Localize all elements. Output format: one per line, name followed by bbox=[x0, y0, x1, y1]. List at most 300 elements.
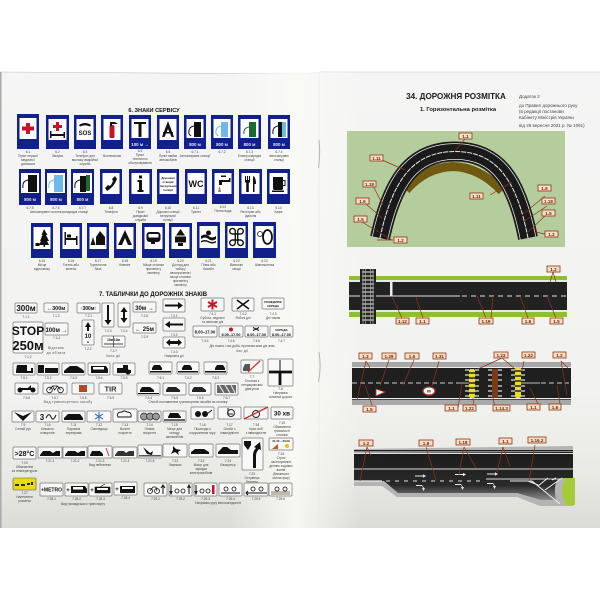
panel: service signs row 1 bbox=[17, 114, 290, 166]
caption: parking method: Спосіб поставлення транспортних засобів на стоянку bbox=[148, 400, 228, 404]
plate 7.4.5: 7.4.5 bbox=[227, 339, 235, 343]
sign 6.1: медичної bbox=[21, 158, 35, 162]
plate 7.21.4 bbox=[113, 447, 137, 463]
plate 7.24: Евакуатор bbox=[220, 463, 236, 467]
plate 7.4.3: Дні тижня bbox=[266, 316, 280, 320]
plate 7.9: Сліпий рух bbox=[15, 427, 31, 431]
text block: addendum note: Кабінету Міністрів України bbox=[519, 115, 574, 120]
sign 6.7.6: 6.7.6 bbox=[52, 206, 60, 210]
plate 7.4.2: 7.4.2 bbox=[239, 312, 247, 316]
sign 6.3: служби bbox=[80, 162, 91, 166]
sign 6.5: Пункт bbox=[136, 153, 145, 157]
sign 6.19: 6.19 bbox=[150, 259, 157, 263]
plate 7.6.6 bbox=[189, 383, 211, 400]
sign 6.10: поліції bbox=[163, 188, 173, 192]
plate 7.1.3 bbox=[44, 303, 68, 318]
sign 6.15: відпочинку bbox=[34, 267, 50, 271]
plate 7.27 marking: розмітки bbox=[18, 499, 31, 503]
sign 6.7.3: 6.7.3 bbox=[246, 150, 253, 154]
labels: 1.11 bbox=[472, 194, 481, 199]
sign 6.2 bbox=[46, 115, 69, 158]
plate 7.13: покриття bbox=[118, 431, 132, 435]
labels: 1.6 bbox=[409, 354, 416, 359]
plate 7.28.4 tram: + bbox=[115, 487, 119, 493]
sign 6.9: 6.9 bbox=[138, 206, 143, 210]
sign 6.23: Шиномонтаж bbox=[255, 263, 275, 267]
heading: section 6: 6. ЗНАКИ СЕРВІСУ bbox=[128, 108, 180, 114]
text block: addendum note: від 29 вересня 2021 р. № 1091) bbox=[519, 123, 585, 128]
plate 7.5.8 dangerous goods: 7.5.8 bbox=[79, 396, 87, 400]
plate 7.4.3: 7.4.3 bbox=[269, 312, 277, 316]
plate 7.11 bbox=[62, 411, 85, 435]
plate 7.28.1 metro bbox=[40, 483, 63, 501]
plate 7.1.4: Відстань bbox=[48, 346, 64, 350]
plate 7.6.4 bbox=[137, 383, 160, 400]
sign 6.1: Пункт першої bbox=[18, 154, 38, 158]
plate 7.18: 7.18 bbox=[253, 423, 259, 427]
plate 7.26: 01.03 – 30.09 bbox=[272, 439, 290, 443]
plate 7.16: 7.16 bbox=[199, 423, 206, 427]
sign 6.20: причепів у bbox=[173, 279, 189, 283]
plate 7.4.2: Робочі дні bbox=[236, 316, 251, 320]
sign 6.1: допомоги bbox=[21, 162, 35, 166]
plate 7.26 bbox=[269, 438, 293, 480]
plate 7.16: порушенням зору bbox=[189, 431, 216, 435]
plate 7.15: автомобілів bbox=[166, 435, 183, 439]
sign 6.16 bbox=[60, 223, 82, 271]
plate 7.6.7 bbox=[215, 383, 238, 400]
plate 7.13: Вологе bbox=[120, 427, 130, 431]
plate 7.4.3 bbox=[262, 298, 284, 320]
brown island bbox=[406, 166, 502, 191]
plate 7.16: Пішоходи з bbox=[194, 427, 211, 431]
sign 6.12: 6.12 bbox=[220, 205, 226, 209]
plate 7.1.2 stop: 250м bbox=[12, 338, 44, 353]
speed limit marking: 60 bbox=[427, 390, 431, 394]
panel: curved road diagram bbox=[347, 131, 565, 247]
labels: 1.18 bbox=[459, 440, 468, 445]
plate 7.6.2: 7.6.2 bbox=[184, 376, 192, 380]
sign 6.6: автомобілів bbox=[159, 158, 177, 162]
text block: addendum note bbox=[519, 94, 585, 128]
plate 7.7: непрацюючим bbox=[242, 383, 262, 387]
sign 6.8: Телефон bbox=[104, 210, 118, 214]
sign 6.7.6 bbox=[30, 169, 88, 214]
plate 7.10 bbox=[36, 411, 59, 435]
plate 7.4.3: СЕРЕДА bbox=[267, 304, 280, 308]
labels: 1.22 bbox=[465, 406, 474, 411]
sign 6.10: патрульної bbox=[160, 214, 176, 218]
sign 6.20: кемпінгу bbox=[174, 283, 187, 287]
plate 7.2.1: 7.2.1 bbox=[85, 314, 92, 318]
plate 7.2.4: 7.2.4 bbox=[120, 329, 128, 333]
plate 7.1.3: 7.1.3 bbox=[52, 314, 60, 318]
labels: 1.5 bbox=[357, 217, 364, 222]
plate 7.4.6: 8.00–17.00 bbox=[247, 333, 266, 337]
sign 6.7.2: 6.7.2 bbox=[218, 150, 226, 154]
sign 6.7.4: 800 м bbox=[273, 142, 285, 147]
sign 6.13 bbox=[239, 169, 262, 218]
plate 7.26: Строк bbox=[277, 456, 286, 460]
plate 7.20 bbox=[12, 447, 38, 473]
plate 7.28.2 bus bbox=[65, 483, 88, 501]
plate 7.3.1: 7.3.1 bbox=[170, 314, 178, 318]
sign 6.10: 6.10 bbox=[165, 206, 171, 210]
panel: service signs row 3 bbox=[31, 222, 276, 287]
plate 7.12 bbox=[87, 411, 111, 431]
plate 7.21.2 bbox=[63, 447, 87, 463]
labels: 1.1 bbox=[502, 439, 509, 444]
sign 6.15: Місце bbox=[38, 263, 46, 267]
sign 6.7.5 bbox=[19, 169, 41, 210]
plate 7.23: електромобілів bbox=[190, 471, 213, 475]
sign 6.21: басейн bbox=[203, 267, 214, 271]
plate 7.1.2 stop bbox=[12, 322, 44, 359]
plate 7.19: стоянки bbox=[276, 433, 288, 437]
sign 6.5: 6.5 bbox=[138, 149, 142, 153]
plate 7.4.7: 8.00–17.00 bbox=[272, 333, 291, 337]
plate 7.1.1 bbox=[15, 303, 37, 319]
plate 7.1.4: 100м → bbox=[45, 328, 68, 334]
sign 6.9: Пункт bbox=[136, 210, 145, 214]
labels: 1.18 bbox=[544, 199, 553, 204]
yellow speed bump right bbox=[515, 367, 521, 398]
plate 7.2.4 bbox=[118, 303, 130, 333]
plate 7.28.3 trolleybus: + bbox=[90, 488, 94, 494]
lane arrows bbox=[415, 472, 498, 491]
plate 7.24 bbox=[216, 444, 240, 467]
plate 7.2.7: Зона дії bbox=[106, 354, 120, 358]
background: green field bbox=[347, 131, 565, 247]
sign 6.10: Дорожня bbox=[161, 176, 175, 180]
sign 6.12 bbox=[212, 169, 234, 213]
plate 7.22: Лижники bbox=[169, 463, 182, 467]
plate 7.4.1 bbox=[200, 298, 225, 324]
plate 7.4.6 bbox=[245, 326, 268, 343]
sign 6.7.3 bbox=[238, 115, 261, 162]
sign 6.7.1 bbox=[180, 115, 210, 158]
text block: addendum note: Додаток 2 bbox=[519, 94, 540, 99]
sign 6.7.6: Автозаправні та електрозарядні станції bbox=[30, 210, 88, 214]
sign 6.3: Телефон для bbox=[75, 154, 95, 158]
sign 6.20: автопричепів і bbox=[170, 271, 191, 275]
plate 7.25: Острівець bbox=[245, 476, 260, 480]
plate 7.2.7: 10м 10м bbox=[107, 338, 120, 342]
sign 6.7.4: Автозаправні bbox=[269, 154, 289, 158]
sign 6.7.4: станції bbox=[274, 158, 284, 162]
curved road bbox=[380, 152, 528, 238]
plate 7.28.3 trolleybus: 7.28.3 bbox=[96, 497, 105, 501]
plate 7.26: денних ходових bbox=[269, 464, 293, 468]
sign 6.17 bbox=[87, 223, 109, 271]
plate 7.28.2 bus: 7.28.2 bbox=[72, 497, 81, 501]
labels: 1.31 bbox=[435, 354, 444, 359]
plate 7.29.5 bbox=[244, 483, 268, 501]
plate 7.29.4 bbox=[219, 483, 242, 501]
sign 6.7.4 bbox=[268, 115, 290, 162]
plate 7.6.5: 7.6.5 bbox=[171, 396, 178, 400]
sign 6.18 bbox=[114, 223, 136, 267]
sign 6.17: база bbox=[95, 267, 102, 271]
plate 7.20: за температурою bbox=[12, 469, 38, 473]
panel: road with exit lane bbox=[354, 437, 575, 506]
plate 7.17 bbox=[218, 407, 241, 435]
labels: 1.2 bbox=[550, 267, 557, 272]
yellow speed bump left bbox=[469, 369, 475, 398]
plate 7.1.2 stop: STOP bbox=[12, 324, 44, 338]
plate 7.11: 7.11 bbox=[71, 423, 77, 427]
plate 7.4.5: 8.00–17.00 bbox=[221, 333, 241, 337]
magazine spread bbox=[0, 72, 600, 528]
plate 7.28.4 tram: 7.28.4 bbox=[121, 496, 130, 500]
sign 6.10: патрульної bbox=[160, 184, 176, 188]
sign 6.7.7: 800 м bbox=[77, 197, 88, 202]
plate 7.3.3: 7.3.3 bbox=[170, 350, 178, 354]
plate 7.5.1 truck: 7.5.1 bbox=[20, 376, 28, 380]
plate 7.23: Місце для bbox=[194, 463, 209, 467]
sign 6.19 bbox=[142, 223, 165, 275]
labels: 1.2 bbox=[397, 238, 404, 243]
plate 7.9: 7.9 bbox=[21, 423, 25, 427]
sign 6.7.4: 6.7.4 bbox=[275, 150, 283, 154]
text block: addendum note: до Правил дорожнього руху bbox=[519, 103, 578, 108]
labels: 1.6 bbox=[541, 186, 548, 191]
sign 6.5: обслуговування bbox=[128, 161, 152, 165]
plate 7.2.8: 7.2.8 bbox=[141, 314, 148, 318]
sign 6.1: 6.1 bbox=[26, 150, 30, 154]
sign 6.23: 6.23 bbox=[261, 259, 268, 263]
sign 6.7.3: Електрозарядні bbox=[238, 154, 261, 158]
plate 7.21.5 bbox=[138, 445, 162, 463]
sign 6.15: 6.15 bbox=[39, 259, 45, 263]
plate 7.2.7: 7.2.7 bbox=[110, 349, 117, 353]
plate 7.2.1 bbox=[77, 303, 100, 318]
caption: cycling direction: Напрямок руху велосипедистів bbox=[195, 501, 241, 505]
labels: 1.5 bbox=[553, 319, 560, 324]
plate 7.24: 7.24 bbox=[225, 459, 231, 463]
plate 7.29.3: 7.29.3 bbox=[201, 497, 210, 501]
labels: 1.11 bbox=[372, 156, 381, 161]
sign 6.3: виклику аварійної bbox=[72, 158, 98, 162]
sign 6.9: служби bbox=[135, 218, 146, 222]
sign 6.15 bbox=[31, 223, 53, 271]
sign 6.23 bbox=[253, 222, 276, 267]
road surface bbox=[354, 446, 573, 506]
plate 7.10: 3 bbox=[40, 413, 45, 422]
plate 7.2.9: 7.2.9 bbox=[141, 335, 148, 339]
plate 7.29.2: 7.29.2 bbox=[176, 497, 185, 501]
plate 7.5.7 bicycle: 7.5.7 bbox=[51, 396, 59, 400]
plate 7.26: 7.26 bbox=[278, 452, 284, 456]
sign 6.7.7 bbox=[71, 169, 94, 210]
labels: 1.14.3 bbox=[495, 406, 508, 411]
plate 7.1.4: 7.1.4 bbox=[53, 336, 60, 340]
plate 7.13: 7.13 bbox=[122, 423, 128, 427]
sign 6.16: мотель bbox=[66, 267, 77, 271]
panel: road with speed bumps bbox=[352, 352, 571, 412]
plate 7.11: Паромна bbox=[67, 427, 80, 431]
plate 7.26: світла фар) bbox=[272, 476, 290, 480]
plate 7.17: 7.17 bbox=[226, 423, 233, 427]
plate 7.4.1: 7.4.1 bbox=[209, 312, 216, 316]
plate 7.15: 7.15 bbox=[171, 423, 178, 427]
plate 7.15: огляду bbox=[170, 431, 180, 435]
plate 7.29.1 bbox=[144, 483, 167, 501]
plate 7.2.2: 7.2.2 bbox=[84, 347, 92, 351]
labels bbox=[392, 266, 563, 324]
plate 7.2.1: ↑300м↑ bbox=[80, 306, 97, 312]
plate 7.4.3: ПОНЕДІЛОК bbox=[264, 300, 282, 304]
sign 6.10: станція bbox=[162, 180, 174, 184]
plate 7.4.2 bbox=[232, 298, 254, 320]
plate 7.4.5 bbox=[219, 326, 243, 343]
panel: distance and zone plates bbox=[12, 298, 293, 359]
plate 7.29.6 bbox=[269, 483, 292, 501]
plate 7.20: 7.20 bbox=[21, 461, 28, 465]
plate 7.3.2 bbox=[163, 318, 185, 337]
sign 6.3: SOS bbox=[79, 131, 91, 137]
labels bbox=[354, 133, 558, 243]
plate 7.4.4: 8.00–17.00 bbox=[195, 330, 216, 334]
sign 6.20: 6.20 bbox=[177, 259, 184, 263]
panel: route and bicycle plates row bbox=[13, 478, 292, 506]
sign 6.10: Дорожні станції bbox=[157, 210, 180, 214]
plate 7.21.5: 7.21.5 bbox=[146, 459, 155, 463]
plate 7.21.1 bbox=[38, 447, 62, 463]
plate 7.3.3: Напрямок дії bbox=[165, 354, 184, 358]
sign 6.7.2 bbox=[211, 115, 233, 154]
sign 6.10 bbox=[157, 169, 180, 222]
plate 7.4.7: 7.4.7 bbox=[278, 339, 285, 343]
caption: public transport: Вид громадського транспорту bbox=[61, 502, 105, 506]
plate 7.22 bbox=[163, 444, 187, 467]
plate 7.29.3 bbox=[194, 483, 217, 501]
plate 7.6.7: 7.6.7 bbox=[223, 396, 230, 400]
plate 7.5.9 TIR: TIR bbox=[104, 384, 117, 394]
labels: 1.1 bbox=[462, 134, 469, 139]
sign 6.7.1: 800 м bbox=[189, 142, 201, 147]
labels: 1.23 bbox=[497, 353, 506, 358]
plate 7.2.2: 10 bbox=[85, 334, 92, 340]
plate 7.27 marking: 7.27 bbox=[21, 491, 28, 495]
plate 7.17: Особи з bbox=[224, 427, 236, 431]
labels: 1.2 bbox=[548, 232, 555, 237]
sign 6.21: 6.21 bbox=[205, 259, 212, 263]
labels: 1.8 bbox=[423, 441, 430, 446]
sign 6.6 bbox=[157, 115, 179, 162]
labels: 1.12 bbox=[398, 319, 407, 324]
plate 7.23: зарядки bbox=[195, 467, 207, 471]
sign 6.4 bbox=[101, 115, 123, 158]
plate 7.10: 7.10 bbox=[44, 423, 51, 427]
sign 6.16: Готель або bbox=[63, 263, 79, 267]
labels: 1.5 bbox=[545, 211, 552, 216]
plate 7.6.4: 7.6.4 bbox=[145, 396, 152, 400]
sign 6.3: 6.3 bbox=[83, 150, 87, 154]
sign 6.9 bbox=[129, 169, 152, 222]
sign 6.6: 6.6 bbox=[166, 150, 170, 154]
plate 7.29.5: 7.29.5 bbox=[252, 497, 261, 501]
labels: 1.6 bbox=[525, 319, 532, 324]
plate 7.4.6: 7.4.6 bbox=[253, 339, 260, 343]
plate 7.6.1: 7.6.1 bbox=[157, 376, 164, 380]
plate 7.17: інвалідністю bbox=[220, 431, 239, 435]
plate 7.19: тривалості bbox=[274, 429, 290, 433]
plate 7.10: Кількість bbox=[41, 427, 54, 431]
plate 7.6.3 bbox=[204, 362, 227, 380]
plate 7.23 bbox=[189, 444, 213, 475]
plate 7.29.2 bbox=[169, 483, 192, 501]
plate 7.2.3 bbox=[102, 303, 114, 333]
chevrons bbox=[510, 478, 562, 504]
sign 6.13: їдальня bbox=[244, 214, 257, 218]
sign 6.6: Пункт мийки bbox=[159, 154, 177, 158]
sign 6.19: Місце стоянки bbox=[143, 263, 164, 267]
sign 6.5: 100 м → bbox=[131, 142, 149, 147]
plate 7.4.4: 7.4.4 bbox=[201, 339, 209, 343]
heading: section 7: 7. ТАБЛИЧКИ ДО ДОРОЖНІХ ЗНАКІВ bbox=[99, 292, 208, 298]
subtitle: horizontal marking: 1. Горизонтальна розмітка bbox=[420, 107, 497, 113]
sign 6.21: Пляж або bbox=[201, 263, 216, 267]
sign 6.14: Кафе bbox=[274, 210, 283, 214]
speed limit marking bbox=[423, 387, 435, 395]
plate 7.26: застосування bbox=[271, 460, 291, 464]
plate 7.7 bbox=[241, 360, 263, 391]
sign 6.2: 6.2 bbox=[55, 150, 60, 154]
sign 6.10: поліції bbox=[163, 218, 173, 222]
sign 6.19: кемпінгу bbox=[147, 271, 160, 275]
sign 6.20: табору bbox=[175, 267, 186, 271]
sign 6.1 bbox=[17, 114, 39, 166]
sign 6.20 bbox=[169, 223, 192, 287]
plate 7.16 bbox=[189, 407, 216, 435]
labels: 1.2 bbox=[556, 353, 563, 358]
labels: 1.16.2 bbox=[531, 438, 544, 443]
plate 7.14: покриття bbox=[143, 431, 156, 435]
labels: 1.29 bbox=[385, 354, 394, 359]
plate 7.28.1 metro: +METRO bbox=[41, 488, 62, 494]
plate 7.18: Крім осіб bbox=[249, 427, 263, 431]
caption: days and hours: Дні тижня і час доби, протягом яких діє знак bbox=[210, 344, 275, 348]
plate 7.19: Обмеження bbox=[273, 425, 291, 429]
sign 6.14: 6.14 bbox=[275, 206, 282, 210]
plate 7.21.4: 7.21.4 bbox=[121, 459, 130, 463]
sign 6.13: Ресторан або bbox=[240, 210, 261, 214]
panel: hazard and vehicle plates row bbox=[12, 438, 293, 484]
plate 7.21.3 bbox=[88, 446, 112, 467]
plate 7.20: >28°C bbox=[15, 450, 34, 458]
plate 7.19: 30 хв bbox=[274, 410, 290, 418]
plate 7.5.2 truck with trailer: 7.5.2 bbox=[44, 376, 52, 380]
sign 6.7.5: 6.7.5 bbox=[26, 206, 34, 210]
plate 7.7: двигуном bbox=[245, 387, 259, 391]
plate 7.14: Пляма bbox=[145, 427, 155, 431]
plate 7.26: вогнів bbox=[277, 468, 286, 472]
plate 7.1.4: до об'єкта bbox=[47, 351, 65, 355]
plate 7.27 marking bbox=[13, 478, 36, 503]
sign 6.12: Питна вода bbox=[215, 209, 232, 213]
labels: 1.1 bbox=[448, 406, 455, 411]
plate 7.1.1: 7.1.1 bbox=[22, 315, 30, 319]
plate 7.8 main road direction bbox=[268, 359, 293, 399]
pedestrian stripes bbox=[465, 370, 525, 396]
plate 7.2.3: 7.2.3 bbox=[104, 329, 112, 333]
sign 6.11: WC bbox=[188, 179, 204, 189]
road lines bbox=[354, 454, 573, 469]
sign 6.7.7: 6.7.7 bbox=[79, 206, 86, 210]
plate 7.8 main road direction: 7.8 bbox=[278, 387, 283, 391]
plate 7.6.1 bbox=[149, 362, 172, 380]
